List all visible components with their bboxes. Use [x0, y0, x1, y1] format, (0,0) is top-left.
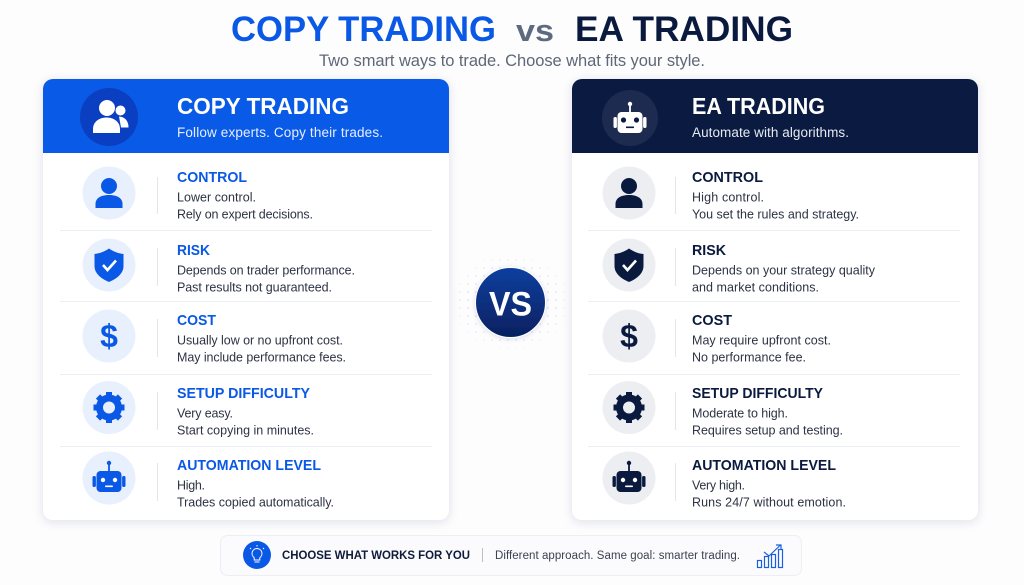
- row: automation level: AUTOMATION LEVEL: [692, 457, 836, 474]
- row: setup difficulty: Moderate to high.: [692, 406, 788, 420]
- row: control: [602, 166, 859, 222]
- row: cost: COST: [692, 312, 732, 329]
- ea trading header: EA TRADING: [692, 93, 825, 119]
- icon: group of people: [80, 88, 138, 146]
- row: risk: RISK: [692, 242, 726, 259]
- title: vs: [516, 13, 554, 48]
- decorative dot field: [459, 259, 565, 341]
- copy trading header: COPY TRADING: [177, 93, 349, 119]
- vs badge: VS: [489, 286, 532, 324]
- row: automation level: Very high.: [692, 478, 745, 492]
- icon: robot head: [602, 90, 658, 146]
- icon: dollar: $: [100, 318, 118, 354]
- subtitle: Two smart ways to trade. Choose what fits your style.: [319, 52, 705, 70]
- icon: growth chart: [758, 545, 782, 568]
- panel: ea trading: [572, 79, 978, 520]
- row: control: Lower control.: [177, 190, 256, 204]
- icon: robot: [92, 461, 126, 492]
- row: automation level: Runs 24/7 without emotion.: [692, 496, 846, 510]
- row: risk: [602, 238, 876, 294]
- row: risk: RISK: [177, 242, 210, 259]
- row: cost: Usually low or no upfront cost.: [177, 334, 343, 348]
- row: cost: May include performance fees.: [177, 350, 346, 364]
- copy trading header: [43, 79, 449, 153]
- row: setup difficulty: Very easy.: [177, 406, 233, 420]
- row: setup difficulty: Start copying in minutes.: [177, 424, 314, 438]
- row: control: You set the rules and strategy.: [692, 208, 859, 222]
- icon: lightbulb: [243, 541, 271, 569]
- row: risk: Depends on trader performance.: [177, 264, 355, 278]
- bottom callout: Different approach. Same goal: smarter trading.: [495, 550, 740, 562]
- row: setup difficulty: SETUP DIFFICULTY: [692, 385, 823, 402]
- row: setup difficulty: [82, 381, 314, 438]
- icon: person: [616, 178, 642, 208]
- row: risk: [82, 238, 355, 294]
- title: COPY TRADING: [231, 10, 496, 49]
- row: control: [82, 166, 313, 222]
- row: cost: May require upfront cost.: [692, 334, 831, 348]
- row: cost: No performance fee.: [692, 350, 806, 364]
- row: cost: [602, 310, 831, 364]
- panel: copy trading: [43, 79, 449, 520]
- vs badge: [476, 268, 546, 338]
- row: setup difficulty: SETUP DIFFICULTY: [177, 385, 310, 402]
- row: automation level: [602, 452, 846, 510]
- row: cost: [82, 310, 346, 364]
- icon: dollar: $: [620, 318, 638, 354]
- row: automation level: [82, 452, 334, 510]
- row: control: CONTROL: [177, 169, 247, 186]
- row: setup difficulty: Requires setup and testing.: [692, 424, 843, 438]
- bottom callout: CHOOSE WHAT WORKS FOR YOU: [282, 550, 470, 562]
- row: cost: COST: [177, 312, 216, 329]
- bottom callout: [220, 536, 802, 576]
- row: automation level: High.: [177, 478, 205, 492]
- icon: person: [96, 178, 122, 208]
- icon: shield: [94, 248, 124, 282]
- row: control: CONTROL: [692, 169, 763, 186]
- icon: gear: [614, 392, 644, 423]
- row: risk: Past results not guaranteed.: [177, 280, 332, 294]
- row: setup difficulty: [602, 381, 843, 438]
- icon: gear: [94, 392, 124, 423]
- row: risk: Depends on your strategy quality: [692, 264, 876, 278]
- title: EA TRADING: [575, 10, 793, 49]
- row: automation level: Trades copied automatically.: [177, 496, 334, 510]
- title: [231, 10, 793, 49]
- row: risk: and market conditions.: [692, 280, 819, 294]
- ea trading header: [572, 79, 978, 153]
- ea trading header: Automate with algorithms.: [692, 125, 849, 140]
- copy trading header: Follow experts. Copy their trades.: [177, 125, 383, 140]
- icon: shield: [614, 248, 644, 282]
- row: automation level: AUTOMATION LEVEL: [177, 457, 321, 474]
- row: control: High control.: [692, 190, 764, 204]
- icon: robot: [612, 461, 646, 492]
- row: control: Rely on expert decisions.: [177, 208, 313, 222]
